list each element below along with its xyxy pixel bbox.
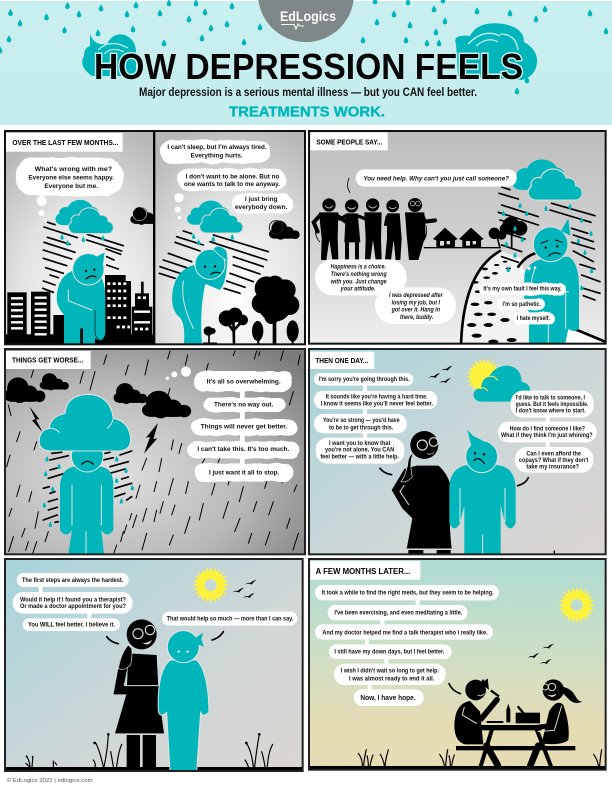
grass — [309, 750, 606, 770]
thought bubbles: everybody down. — [235, 204, 288, 211]
logo badge: EdLogics — [280, 9, 336, 24]
icon: birds — [428, 366, 453, 383]
thought bubbles: I can't sleep, but I'm always tired. — [167, 144, 267, 151]
label: a few months later — [310, 561, 420, 580]
speech bubble: i was depressed: I was depressed after — [389, 292, 443, 299]
panel frame — [309, 559, 606, 770]
speech tails — [107, 632, 223, 644]
label: then one day — [310, 352, 374, 369]
speech bubble: i was depressed: losing my job, but I — [392, 299, 440, 306]
label: some people say — [310, 132, 388, 150]
thought bubble trail — [174, 193, 184, 219]
speech bubbles: recovery: And my doctor helped me find a talk therapist who I really like. — [322, 629, 488, 636]
icons: storm clouds — [4, 373, 191, 418]
picnic table — [456, 725, 575, 766]
icon: rain cloud — [55, 200, 113, 234]
speech bubbles: friend: feel better — with a little help. — [320, 453, 399, 460]
icon: rain cloud — [512, 159, 582, 200]
speech bubbles: recovery: I've been exercising, and even meditating a little. — [334, 609, 463, 616]
icons: lightning bolts — [29, 406, 158, 454]
speech bubbles: man: How do I find someone I like? — [510, 425, 585, 432]
panel: some people say — [309, 131, 607, 345]
thought bubbles: overwhelmed: I just want it all to stop. — [209, 469, 280, 476]
panel: things get worse — [4, 349, 305, 554]
speech bubble: happiness is a choice — [315, 259, 407, 295]
ground line and houses — [424, 228, 500, 248]
speech bubbles: friend: Or made a doctor appointment for you? — [20, 603, 126, 610]
panel: a few months later — [309, 559, 606, 770]
picnic items — [487, 704, 540, 723]
speech bubbles: recovery — [315, 585, 499, 706]
panel frame — [5, 131, 305, 344]
label: things get worse — [6, 351, 91, 369]
rain drops — [192, 233, 234, 245]
speech bubbles: man: take my insurance? — [526, 464, 579, 471]
character: woman comforting — [115, 619, 164, 768]
thought bubbles: I don't want to be alone. But no — [186, 173, 279, 180]
speech bubble: happiness is a choice: There's nothing wrong — [331, 271, 387, 278]
panel: first steps — [5, 559, 303, 784]
panel divider — [153, 131, 155, 344]
speech bubbles: friend: I want you to know that — [329, 440, 391, 447]
thought bubble trail — [166, 367, 191, 380]
rain hatching — [43, 222, 123, 292]
speech bubble: man: That would help so much — more than I can say. — [167, 616, 294, 623]
speech bubbles: recovery: I was almost ready to end it all. — [349, 675, 435, 682]
thought bubble: Everyone else seems happy. — [28, 175, 114, 182]
thought bubbles: Everything hurts. — [191, 152, 243, 159]
road — [461, 251, 607, 345]
character: woman at table — [530, 679, 582, 766]
rain hatching — [43, 451, 132, 522]
speech bubbles: friend: The first steps are always the hardest. — [22, 577, 124, 584]
grass — [5, 733, 303, 772]
speech tail — [449, 684, 460, 694]
thought bubbles: overwhelmed: Things will never get better. — [201, 424, 288, 431]
title: HOW DEPRESSION FEELS — [94, 46, 523, 87]
rain drops — [60, 234, 105, 246]
panel frame — [309, 131, 606, 344]
panel background — [5, 131, 154, 344]
speech bubbles: friend — [13, 573, 133, 631]
thought bubbles: self blame: I hate myself. — [517, 315, 550, 322]
panel background — [309, 131, 606, 344]
label: some people say: SOME PEOPLE SAY... — [316, 137, 382, 146]
ground marks — [552, 551, 556, 554]
rain drops — [0, 0, 608, 94]
panel background — [309, 559, 606, 770]
logo badge — [258, 0, 354, 42]
speech bubbles: friend: Would it help if I found you a therapist? — [20, 596, 126, 603]
icon: left header cloud — [82, 34, 136, 76]
rain hatching — [498, 187, 600, 300]
thought bubbles: self blame — [479, 266, 566, 324]
subtitle: Major depression is a serious mental illness — but you CAN feel better. — [139, 87, 477, 99]
speech bubbles: recovery: I wish I didn't wait so long to get help. — [341, 668, 439, 675]
tagline: TREATMENTS WORK. — [229, 104, 385, 120]
panel background — [154, 131, 305, 344]
speech bubbles: man: Can I even afford the — [526, 451, 581, 458]
thought bubbles: one wants to talk to me anyway. — [184, 181, 280, 188]
speech bubbles: friend: You WILL feel better. I believe it. — [28, 622, 115, 629]
group of people — [314, 178, 435, 260]
speech bubbles: friend: You're so strong — you'd have — [323, 417, 400, 424]
icon: sun behind cloud — [466, 358, 530, 402]
icon: sun — [558, 587, 595, 623]
speech bubble: i was depressed: there, buddy. — [400, 314, 434, 321]
character: person under big cloud — [39, 394, 131, 554]
label: a few months later: A FEW MONTHS LATER... — [316, 567, 410, 576]
panel frame — [5, 349, 305, 554]
thought bubbles: overwhelmed: I can't take this. It's too much. — [197, 446, 290, 453]
icon: dark cloud — [130, 206, 153, 225]
speech bubble: happiness is a choice: with you. Just change — [331, 278, 387, 285]
icon: sun — [192, 567, 229, 603]
rain drops — [43, 456, 134, 527]
panel frame — [5, 559, 303, 771]
speech bubbles: friend — [314, 373, 437, 464]
thought bubbles: self blame: It's my own fault I feel this way. — [483, 286, 562, 293]
speech bubbles: man: What if they think I'm just whining? — [501, 432, 593, 439]
rain drops — [502, 202, 593, 290]
thought bubble: What's wrong with me? — [35, 166, 112, 173]
icon: birds — [527, 644, 554, 664]
city skyline — [0, 275, 157, 344]
panel frame — [309, 349, 606, 554]
rain hatching — [159, 231, 268, 293]
speech bubbles: recovery: I still have my down days, but I feel better. — [334, 649, 445, 656]
speech bubbles: recovery: It took a while to find the right meds, but they seem to be helping. — [322, 590, 494, 597]
speech bubble: you need help: You need help. Why can't you just call someone? — [363, 176, 509, 183]
character: woman — [392, 431, 464, 554]
header band — [0, 0, 612, 125]
speech bubbles: man: I'd like to talk to someone, I — [516, 394, 585, 401]
icon: birds — [232, 580, 257, 598]
speech bubbles: man — [498, 391, 597, 473]
panel background — [309, 349, 606, 554]
panel: over the last few months, right — [5, 131, 305, 344]
label: over the last few months: OVER THE LAST FEW MONTHS... — [12, 138, 118, 147]
speech bubbles: friend: I know it seems like you'll never feel better. — [321, 400, 433, 407]
thought bubbles: I just bring — [245, 196, 277, 203]
panel: then one day — [309, 349, 606, 554]
character: man at table — [454, 678, 500, 765]
thought bubbles: self blame: I'm so pathetic. — [502, 301, 541, 308]
character: person with hand on head — [172, 246, 228, 344]
label: things get worse: THINGS GET WORSE... — [12, 356, 83, 365]
speech bubble: i was depressed: got over it. Hang in — [391, 307, 440, 314]
speech bubbles: friend: you're not alone. You CAN — [325, 447, 395, 454]
thought bubbles: overwhelmed: It's all so overwhelming. — [207, 379, 281, 386]
thought bubble — [15, 158, 123, 196]
icon: rain cloud — [187, 201, 243, 233]
thought bubble trail — [37, 196, 47, 222]
speech bubbles: friend: It sounds like you're having a hard time. — [326, 394, 428, 401]
icon: trees — [203, 276, 299, 344]
character: man — [449, 430, 516, 554]
panel background — [5, 559, 303, 771]
icon: dark cloud — [269, 221, 300, 240]
character: man comforted — [158, 631, 209, 772]
speech bubbles: man: I don't know where to start. — [516, 408, 586, 415]
character: sad person — [57, 252, 105, 344]
speech tails — [380, 468, 528, 486]
speech bubbles: man: copays? What if they don't — [519, 457, 589, 464]
label: over the last few months — [6, 133, 123, 152]
speech bubbles: friend: to be to get through this. — [329, 424, 394, 431]
speech bubbles: man: guess. But it feels impossible. — [516, 401, 589, 408]
heavy rain streaks — [7, 351, 300, 554]
panel background — [5, 349, 305, 554]
label: then one day: THEN ONE DAY... — [315, 356, 368, 365]
footer credit: © EdLogics 2022 | edlogics.com — [7, 777, 93, 784]
speech bubble: happiness is a choice: your attitude. — [340, 285, 376, 292]
speech bubbles: recovery: Now, I have hope. — [360, 693, 416, 702]
icon: trees — [489, 217, 527, 248]
thought bubbles — [160, 140, 293, 213]
speech bubbles: friend: I'm sorry you're going through this. — [319, 376, 410, 383]
speech bubble: man — [162, 612, 297, 626]
speech bubble: i was depressed — [375, 287, 456, 324]
character: despondent person — [524, 218, 579, 345]
speech bubble: happiness is a choice: Happiness is a choice. — [331, 263, 386, 270]
panel: over the last few months, left — [0, 131, 160, 344]
thought bubbles: overwhelmed: There's no way out. — [214, 402, 274, 409]
thought bubbles: overwhelmed — [188, 371, 299, 482]
icon: right header cloud — [455, 23, 537, 80]
thought bubble: Everyone but me. — [44, 183, 98, 190]
speech bubble: you need help — [356, 169, 517, 187]
